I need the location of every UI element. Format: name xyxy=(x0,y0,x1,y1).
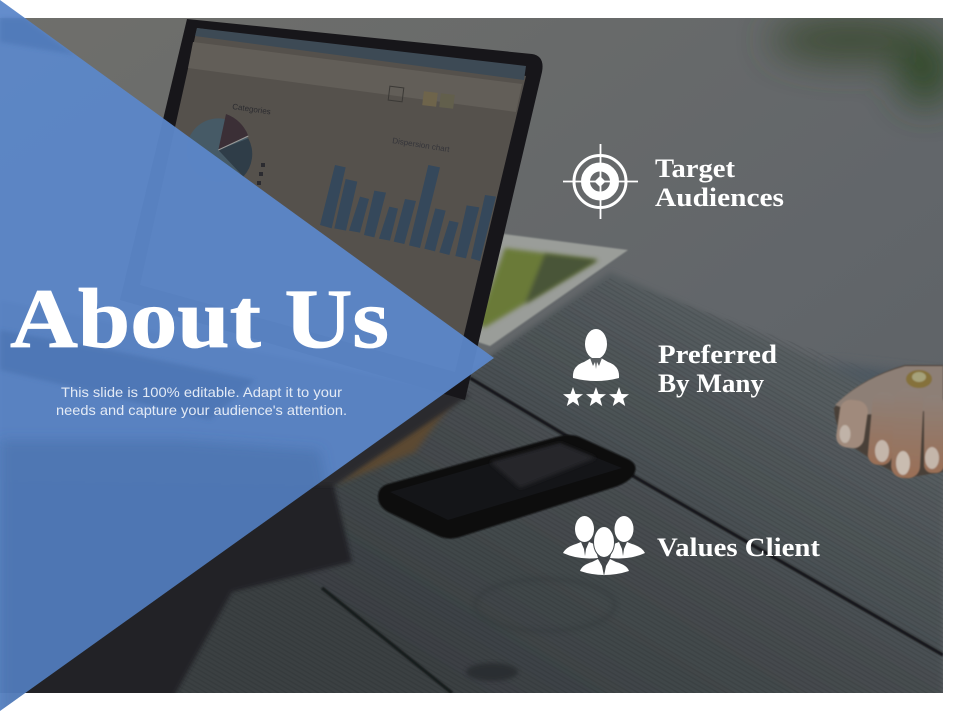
blue triangle panel xyxy=(0,0,494,711)
laptop screen xyxy=(163,19,543,400)
foliage top right xyxy=(770,18,953,106)
laptop base and shadow xyxy=(343,412,446,482)
label: values client: Values Client xyxy=(657,533,820,562)
label: preferred by many: Preferred xyxy=(658,340,778,369)
description: This slide is 100% editable. Adapt it to your xyxy=(61,384,342,400)
description xyxy=(56,384,347,418)
label: preferred by many: By Many xyxy=(658,369,764,398)
wood knots xyxy=(466,663,518,681)
phone xyxy=(378,435,636,539)
label: target audiences: Audiences xyxy=(655,183,784,212)
icon: target xyxy=(563,144,638,219)
laptop screen: Dispersion chart xyxy=(392,136,451,154)
hand with ring xyxy=(834,365,944,479)
title: About Us xyxy=(10,272,389,366)
label: preferred by many xyxy=(658,340,778,398)
icon: person with three stars xyxy=(563,329,629,406)
screen chart captions: Categories xyxy=(232,102,271,116)
screen bar chart xyxy=(320,165,496,261)
label: target audiences xyxy=(655,154,784,212)
description: needs and capture your audience's attention. xyxy=(56,402,347,418)
ribbon buttons xyxy=(422,91,438,107)
shading inside panel xyxy=(0,18,340,720)
icon: client group xyxy=(563,516,645,576)
label: target audiences: Target xyxy=(655,154,735,183)
plank seams xyxy=(470,378,943,655)
screen pie chart xyxy=(190,114,252,176)
wooden table xyxy=(150,272,943,700)
tablet xyxy=(472,234,628,346)
